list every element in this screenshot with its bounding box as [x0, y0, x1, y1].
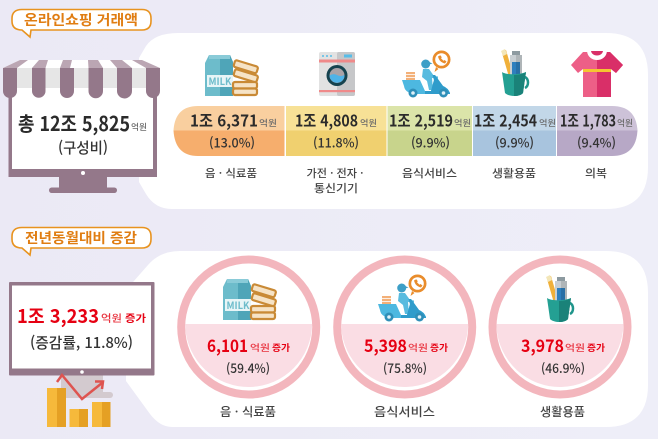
heading: online shopping transaction value: [12, 10, 151, 37]
segment: clothing: [560, 108, 633, 152]
total increase text: [17, 302, 146, 353]
segment: food services: (9.9%): [411, 132, 450, 152]
segment: home appliances: 1조 4,808: [295, 108, 358, 132]
segment: home appliances: (11.8%): [313, 132, 359, 152]
category labels: 가전 · 전자 ·: [306, 165, 364, 181]
total increase text: 증가: [125, 310, 146, 325]
segment: food and beverages: 억원: [259, 117, 277, 129]
circle: household goods increase: 억원: [565, 341, 585, 354]
segment: food and beverages: 1조 6,371: [190, 108, 258, 132]
icon: coin stacks with rising arrow: [47, 375, 110, 427]
chart: category share bar: [174, 106, 638, 156]
heading: year-on-year change: [12, 228, 151, 255]
circle: household goods increase: (46.9%): [541, 358, 585, 377]
segment: household goods: [474, 108, 556, 152]
total amount: [18, 108, 147, 158]
circle: food and beverages increase: 증가: [272, 341, 291, 354]
segment: food and beverages: [190, 108, 277, 152]
panel: year-on-year categories: [126, 251, 648, 427]
category labels: [205, 165, 607, 196]
category labels: 음 · 식료품: [205, 165, 257, 181]
category labels: 음식서비스: [402, 165, 457, 181]
segment: household goods: 억원: [539, 117, 556, 129]
icon: delivery scooter: [378, 274, 426, 322]
segment: food services: 1조 2,519: [389, 108, 453, 132]
circle: food services increase: 억원: [408, 341, 428, 354]
circle: food and beverages increase: 6,101: [207, 332, 248, 357]
circle: food services increase: 증가: [430, 341, 449, 354]
total increase text: 억원: [101, 310, 122, 325]
circle: household goods increase: [488, 256, 632, 420]
circle: household goods increase: 3,978: [521, 332, 564, 357]
total amount: (구성비): [58, 137, 108, 158]
circle: food services increase: 5,398: [364, 332, 407, 357]
segment: food and beverages: (13.0%): [209, 132, 255, 152]
segment: home appliances: [295, 108, 377, 152]
panel: online shopping categories: [139, 33, 648, 209]
category labels: 통신기기: [314, 180, 358, 196]
circle: household goods increase: 증가: [587, 341, 606, 354]
segment: food services: 억원: [454, 117, 471, 129]
circle: food services increase: 음식서비스: [374, 403, 435, 420]
total amount: 억원: [131, 121, 147, 133]
panel: storefront monitor with total: [3, 60, 160, 193]
circle: food and beverages increase: 억원: [250, 341, 270, 354]
segment: household goods: (9.9%): [495, 132, 534, 152]
icon: washing machine: [319, 52, 355, 96]
icon: delivery scooter: [402, 50, 450, 98]
circle: food and beverages increase: [177, 256, 320, 420]
heading: online shopping transaction value: 온라인쇼핑 거래액: [24, 10, 138, 30]
icon: milk and cookies: [205, 55, 258, 96]
segment: clothing: (9.4%): [577, 132, 616, 152]
segment: food services: [389, 108, 471, 152]
circle: food and beverages increase: 음 · 식료품: [220, 403, 276, 420]
total increase text: (증감률, 11.8%): [30, 332, 133, 353]
icon: t-shirt: [571, 51, 623, 97]
segment: clothing: 억원: [617, 117, 633, 129]
circle: food services increase: (75.8%): [383, 358, 427, 377]
icon: milk and cookies: [223, 279, 276, 320]
total amount: 총 12조 5,825: [18, 108, 130, 137]
circle: household goods increase: 생활용품: [540, 403, 585, 420]
category labels: 의복: [585, 165, 607, 181]
heading: year-on-year change: 전년동월대비 증감: [25, 228, 137, 248]
segment: household goods: 1조 2,454: [474, 108, 537, 132]
icon: toothbrush cup: [501, 49, 528, 96]
segment: clothing: 1조 1,783: [560, 108, 616, 132]
panel: monitor with total increase: [9, 282, 154, 398]
total increase text: 1조 3,233: [17, 302, 99, 329]
segment: home appliances: 억원: [360, 117, 377, 129]
category labels: 생활용품: [492, 165, 536, 181]
circle: food and beverages increase: (59.4%): [226, 358, 270, 377]
circle: food services increase: [333, 256, 476, 420]
icon: toothbrush cup: [546, 275, 573, 322]
